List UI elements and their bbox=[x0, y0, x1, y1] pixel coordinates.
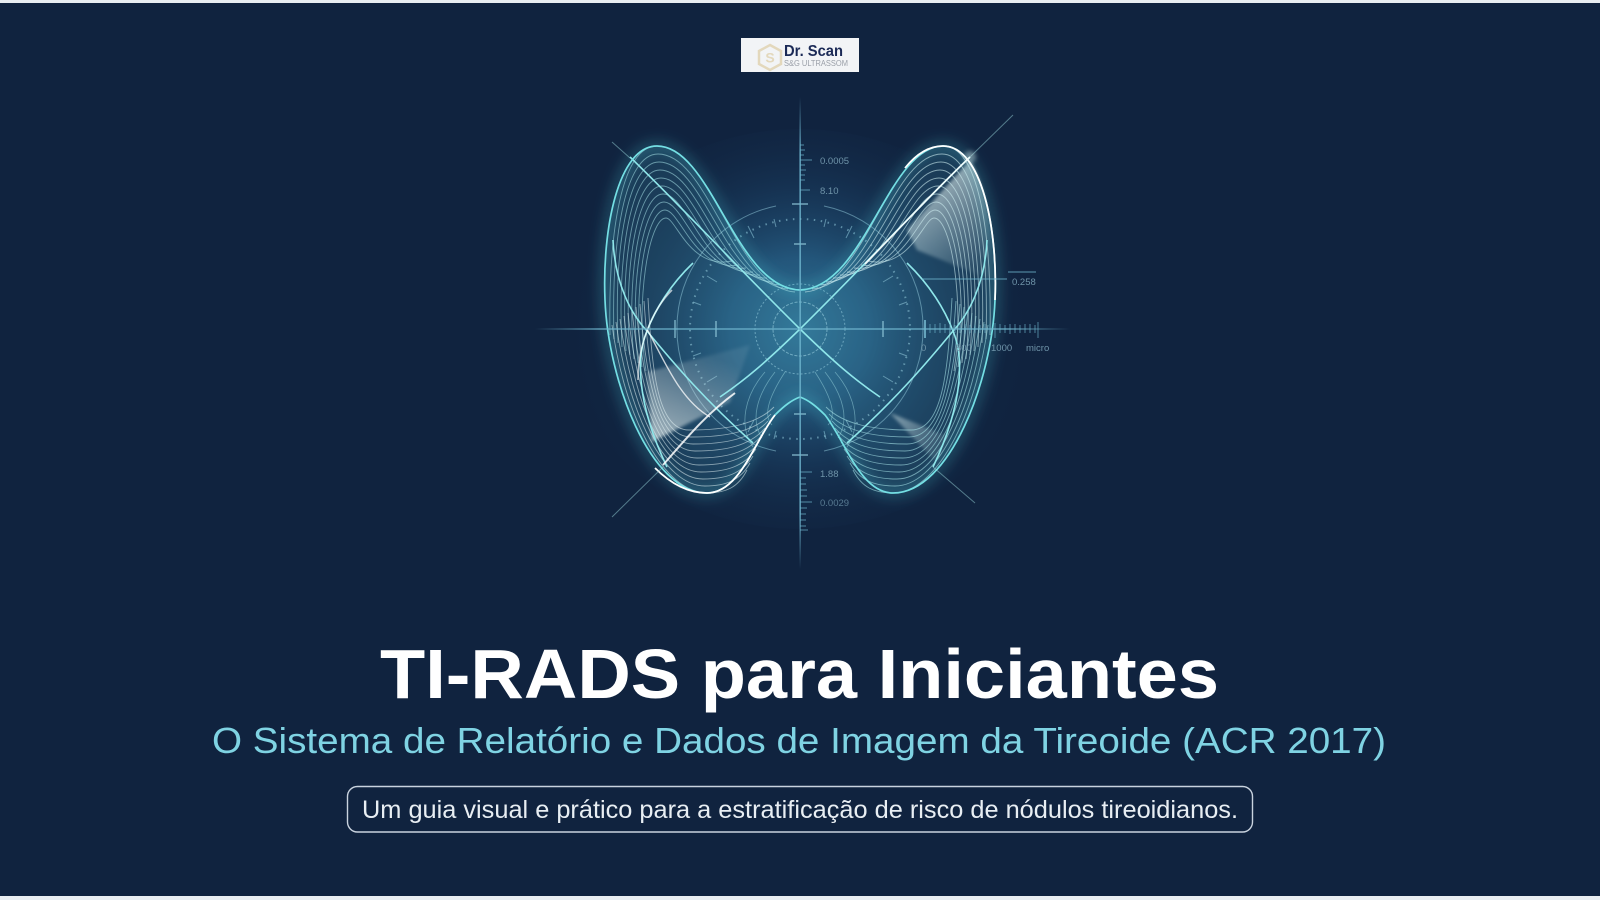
logo name: Dr. Scan bbox=[784, 43, 843, 60]
scale labels: 500 bbox=[956, 343, 972, 354]
scale labels bbox=[820, 156, 1049, 509]
icon: hexagon S: S bbox=[765, 50, 775, 66]
scale labels: 0.258 bbox=[1012, 277, 1036, 288]
outer glow of the lobes bbox=[605, 146, 995, 493]
logo tagline: S&G ULTRASSOM bbox=[784, 59, 848, 68]
central blue halo bbox=[565, 129, 1035, 529]
scale rulers bbox=[800, 145, 1038, 530]
tagline text: Um guia visual e prático para a estratificação de risco de nódulos tireoidianos. bbox=[362, 796, 1238, 824]
title: TI-RADS para Iniciantes bbox=[380, 635, 1219, 713]
crossing strands bbox=[613, 157, 987, 467]
scale labels: micro bbox=[1026, 343, 1049, 354]
bright highlights bbox=[638, 146, 995, 493]
tagline pill bbox=[348, 786, 1252, 832]
reticle: circles and ticks bbox=[675, 204, 925, 455]
crosshair axes bbox=[535, 97, 1070, 569]
star streaks bbox=[612, 115, 1013, 517]
right lobe line family bbox=[805, 146, 990, 493]
lobe translucent fills bbox=[647, 160, 992, 463]
left lobe line family bbox=[610, 146, 795, 493]
lobe translucent body bbox=[605, 146, 995, 493]
lobe outlines bbox=[605, 146, 995, 493]
scale labels: 0.0005 bbox=[820, 156, 849, 167]
central fan lines bbox=[745, 372, 855, 447]
scale labels: 0 bbox=[921, 343, 926, 354]
scale labels: 1.88 bbox=[820, 469, 838, 480]
star flare bbox=[964, 151, 976, 163]
scale labels: 1000 bbox=[991, 343, 1012, 354]
thyroid illustration bbox=[535, 97, 1070, 569]
subtitle: O Sistema de Relatório e Dados de Imagem da Tireoide (ACR 2017) bbox=[212, 720, 1386, 761]
scale labels: 8.10 bbox=[820, 186, 838, 197]
scale labels: 0.0029 bbox=[820, 498, 849, 509]
logo bbox=[741, 38, 859, 72]
